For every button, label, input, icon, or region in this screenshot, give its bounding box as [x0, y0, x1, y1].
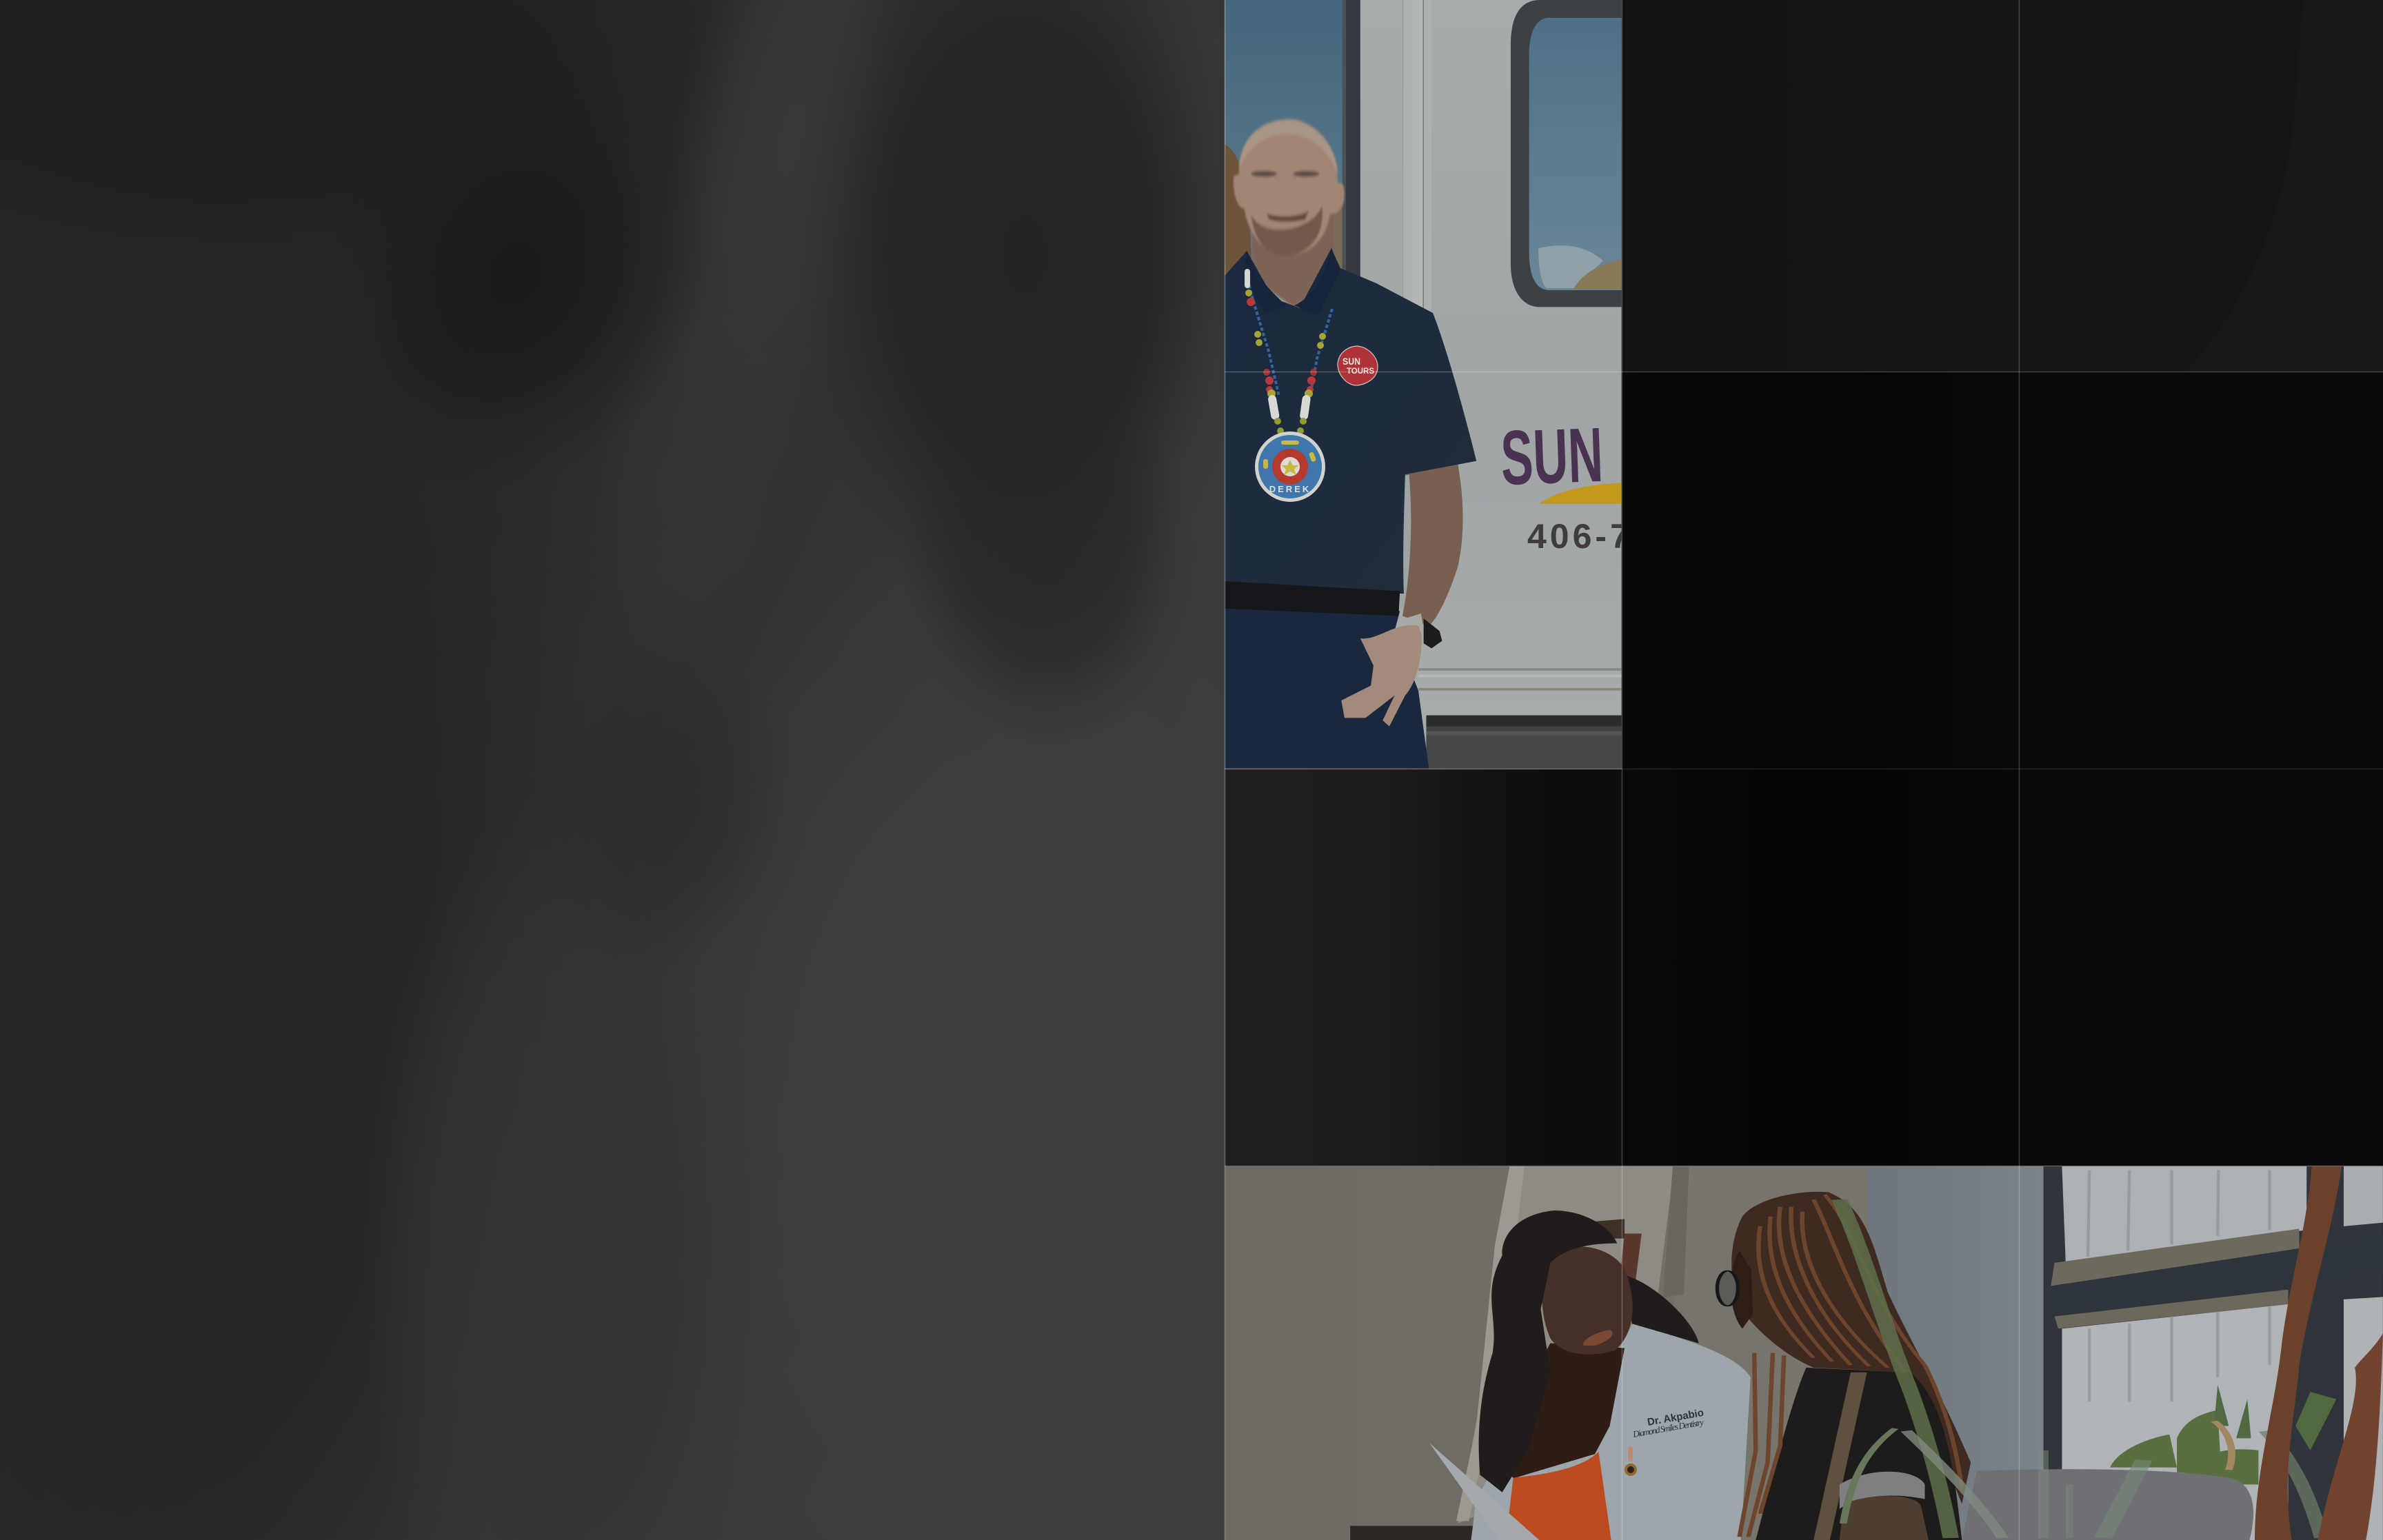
- dentist chest and neck: [1505, 1344, 1625, 1479]
- man belt: [1225, 581, 1400, 616]
- panel: dark cell row 3 column 1: [1225, 769, 1622, 1166]
- man jeans: [1225, 606, 1429, 769]
- patient long braids: [1731, 1192, 1971, 1504]
- photo: man with necklace beside tour van: [1225, 0, 1633, 769]
- man polo shirt: [1225, 248, 1476, 594]
- van logo wordmark: SUN: [1499, 412, 1605, 501]
- shirt badge: [1338, 346, 1378, 385]
- right van window: [1511, 0, 1622, 307]
- dentist orange top: [1506, 1452, 1611, 1540]
- braid strands: [1740, 1195, 1962, 1537]
- panel: dark cell row 3 column 3: [2019, 769, 2383, 1166]
- sweater pattern: [1813, 1372, 1929, 1540]
- van lower trim: [1418, 668, 1622, 769]
- van door seam: [1402, 0, 1431, 318]
- gap between arm and torso: [1404, 474, 1411, 609]
- beaded medallion: DEREK: [1269, 484, 1311, 494]
- panel: dark cell row 1 column 3: [2019, 0, 2383, 372]
- dentist coat: [1471, 1324, 1751, 1540]
- panel: dark cell row 1 column 2: [1622, 0, 2019, 372]
- man arm: [1402, 465, 1463, 626]
- dentist nose and lips: [1583, 1330, 1613, 1346]
- man head and neck: [1234, 119, 1345, 308]
- panel: dark cell row 3 column 2: [1622, 769, 2019, 1166]
- man hand and wristwatch: [1341, 614, 1442, 727]
- dentist face: [1542, 1246, 1633, 1355]
- van logo swoosh: [1540, 483, 1622, 504]
- patient face edge and glasses: [1717, 1250, 1753, 1328]
- van phone number: 406-7: [1527, 517, 1633, 556]
- left van window reflection: [1225, 0, 1360, 283]
- rust-coloured stems: [2255, 1166, 2383, 1540]
- houseplant on windowsill: [2110, 1385, 2336, 1484]
- coat name embroidery: Dr. Akpabio: [1647, 1407, 1705, 1428]
- foreground grass blades: [1840, 1199, 2322, 1538]
- decorative corner glow: [2186, 0, 2383, 372]
- desk corner: [1350, 1526, 1480, 1540]
- beaded medallion: [1255, 432, 1325, 502]
- room walls: [1225, 1166, 2045, 1540]
- upholstered chair: [1962, 1469, 2253, 1540]
- dentist hair back: [1625, 1275, 1699, 1344]
- van body: [1225, 0, 1622, 769]
- necklace cords and beads: [1245, 269, 1332, 434]
- framed certificate on wall: [1456, 1166, 1689, 1523]
- panel: dark cell row 2 column 3: [2019, 372, 2383, 769]
- shirt badge: SUN: [1343, 356, 1360, 367]
- panel: blurred dark background: [0, 0, 1225, 1540]
- window panes and frame: [2044, 1166, 2383, 1540]
- dentist hair: [1479, 1210, 1617, 1492]
- shirt collar: [1265, 247, 1335, 307]
- coat pins: [1625, 1446, 1637, 1476]
- coat practice embroidery: Diamond Smiles Dentistry: [1631, 1417, 1705, 1439]
- panel: dark cell row 2 column 2: [1622, 372, 2019, 769]
- shirt badge: TOURS: [1347, 366, 1374, 376]
- patient sweater: [1756, 1368, 1962, 1540]
- photo: dentist talking with a patient: [1225, 1166, 2383, 1540]
- grid lines: [1225, 0, 2383, 1540]
- paper held by dentist: [1429, 1443, 1539, 1540]
